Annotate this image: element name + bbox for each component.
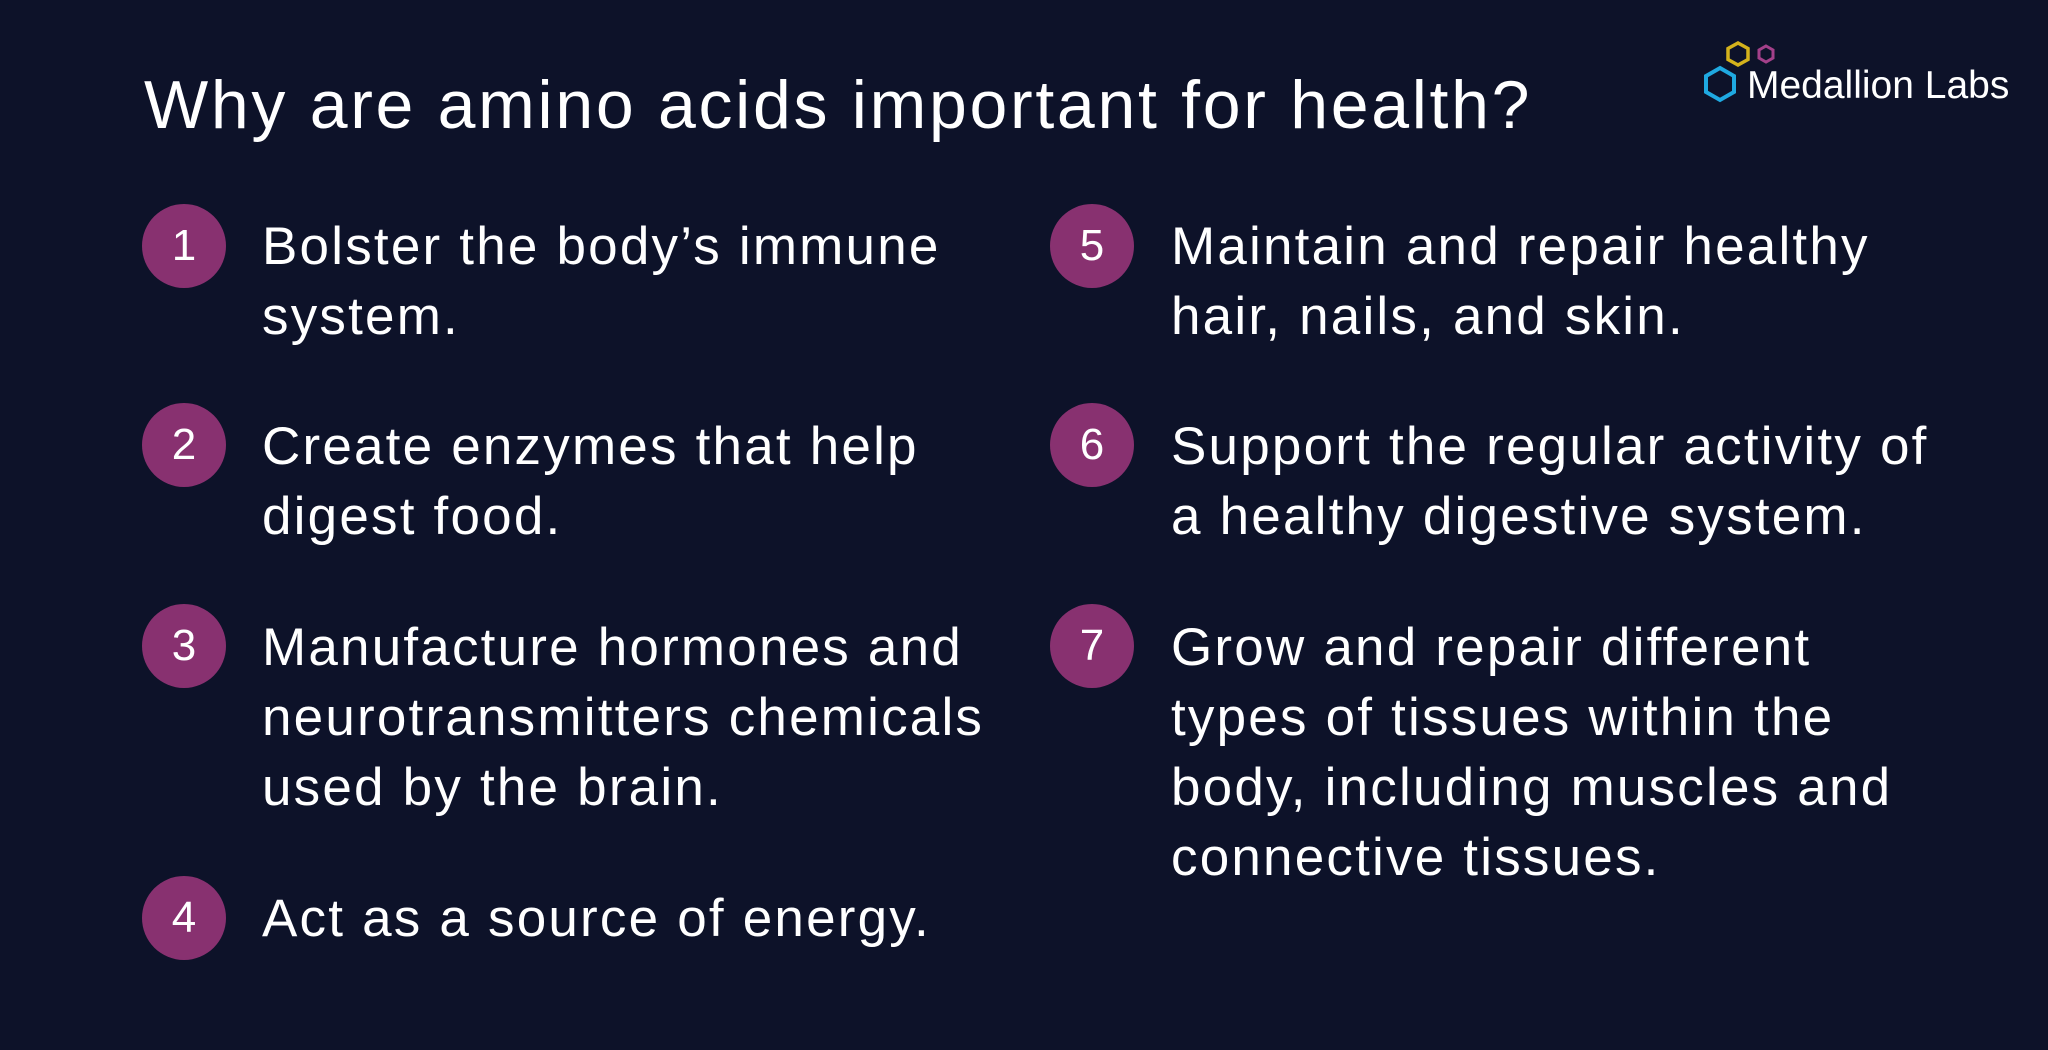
item 6: a healthy digestive system. [1171,487,1867,546]
item 5: Maintain and repair healthy [1171,217,1870,276]
item 1 [142,204,941,346]
item 7 [1050,604,1892,887]
item 5: 5 [1080,221,1104,270]
item 2 [142,403,919,546]
item 2: 2 [172,420,196,469]
item 5: hair, nails, and skin. [1171,287,1685,346]
item 6 [1050,403,1929,546]
title: Why are amino acids important for health? [144,67,1532,143]
item 7: Grow and repair different [1171,618,1811,677]
item 2: digest food. [262,487,562,546]
item 5 [1050,204,1870,346]
item 7: body, including muscles and [1171,758,1892,817]
item 3 [142,604,984,817]
logo [1704,41,2009,107]
item 4: Act as a source of energy. [262,889,931,948]
item 4: 4 [172,893,196,942]
item 1: Bolster the body’s immune [262,217,941,276]
item 3: Manufacture hormones and [262,618,963,677]
item 2: Create enzymes that help [262,417,919,476]
item 1: 1 [172,221,196,270]
logo: Medallion Labs [1747,64,2009,107]
item 7: types of tissues within the [1171,688,1834,747]
item 3: 3 [172,621,196,670]
item 3: neurotransmitters chemicals [262,688,984,747]
item 7: 7 [1080,621,1104,670]
item 6: Support the regular activity of [1171,417,1929,476]
item 6: 6 [1080,420,1104,469]
item 3: used by the brain. [262,758,723,817]
item 7: connective tissues. [1171,828,1661,887]
item 1: system. [262,287,460,346]
item 4 [142,876,931,960]
